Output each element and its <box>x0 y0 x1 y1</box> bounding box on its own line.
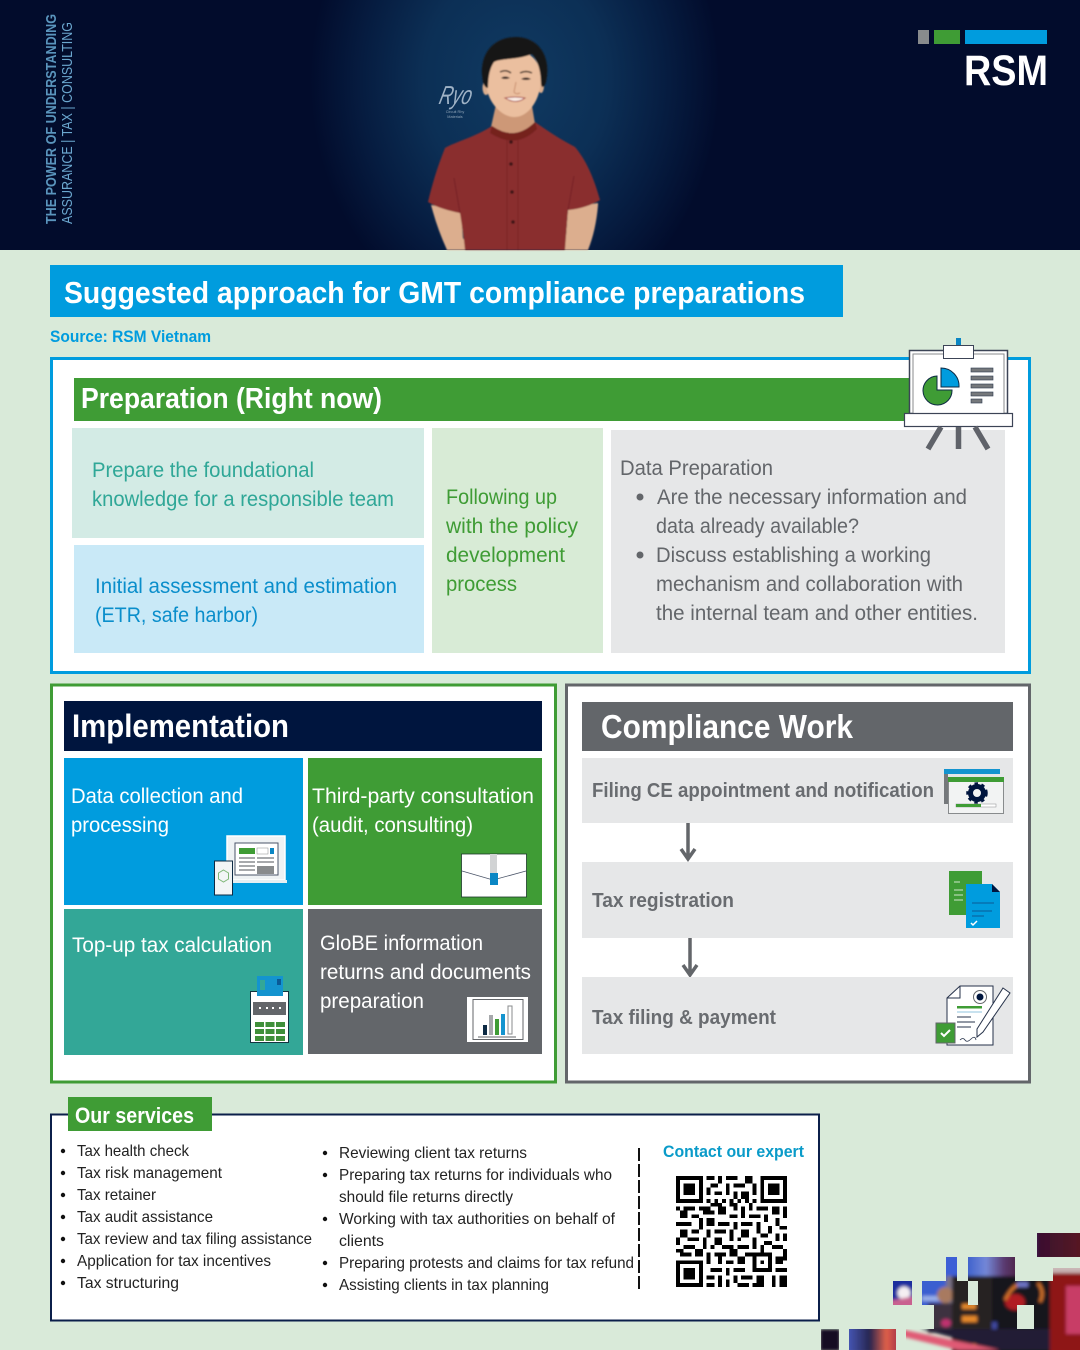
logo: RSM <box>918 30 1048 95</box>
heading: our services: Our services <box>75 1103 194 1128</box>
logo: RSM: RSM <box>964 47 1048 95</box>
heading: preparation <box>74 378 919 421</box>
icon: signed contract <box>936 986 1010 1045</box>
card: data collection: Data collection and <box>71 785 243 808</box>
card: policy follow-up <box>432 428 603 653</box>
card: top-up tax calculation <box>64 909 303 1055</box>
step: tax registration: Tax registration <box>592 889 734 912</box>
heading: compliance work: Compliance Work <box>601 708 854 745</box>
card: initial assessment: (ETR, safe harbor) <box>95 604 258 627</box>
card: data preparation: Are the necessary information and <box>657 486 967 509</box>
list: services left column: Tax health check <box>77 1143 190 1160</box>
card: foundational knowledge: knowledge for a responsible team <box>92 488 394 511</box>
panel: our services <box>51 1097 819 1320</box>
icon: documents <box>949 871 1000 928</box>
card: GloBE information returns <box>308 909 542 1054</box>
signature <box>437 80 476 119</box>
list: services left column: Tax audit assistance <box>77 1209 213 1226</box>
card: foundational knowledge: Prepare the foundational <box>92 459 314 482</box>
signature: Materials <box>447 115 463 119</box>
list: services left column: Application for tax incentives <box>77 1253 271 1270</box>
card: initial assessment <box>74 545 424 653</box>
heading: implementation <box>64 701 542 751</box>
card: initial assessment: Initial assessment and estimation <box>95 575 397 598</box>
card: policy follow-up: process <box>446 573 517 596</box>
panel: compliance work <box>566 685 1030 1082</box>
card: data preparation: Discuss establishing a working <box>656 544 931 567</box>
list: services right column: Assisting clients in tax planning <box>339 1277 549 1294</box>
card: data preparation <box>611 430 1005 653</box>
list: services left column: Tax retainer <box>77 1187 157 1204</box>
list: services right column <box>323 1145 634 1294</box>
card: data collection <box>64 758 303 905</box>
heading: compliance work <box>582 702 1013 751</box>
icon: bar chart <box>467 997 528 1042</box>
step: filing CE appointment <box>582 758 1013 823</box>
heading: preparation: Preparation (Right now) <box>81 383 382 415</box>
list: services right column: Reviewing client tax returns <box>339 1145 527 1162</box>
title banner <box>50 265 843 317</box>
panel: implementation <box>52 685 556 1082</box>
icon: calculator <box>250 976 288 1042</box>
icon: envelope <box>462 854 526 897</box>
icon: presentation easel <box>904 338 1012 449</box>
list: services right column: Preparing tax returns for individuals who <box>339 1167 612 1184</box>
card: policy follow-up: with the policy <box>445 515 578 538</box>
list: services left column <box>61 1143 312 1292</box>
card: third-party consultation <box>308 758 542 905</box>
icon: settings window <box>944 769 1004 814</box>
card: data preparation: the internal team and other entities. <box>656 602 978 625</box>
step: filing CE appointment: Filing CE appointment and notification <box>592 779 934 802</box>
icon: laptop and phone <box>214 836 287 895</box>
list: services right column: Working with tax authorities on behalf of <box>339 1211 616 1228</box>
card: third-party consultation: (audit, consulting) <box>312 814 473 837</box>
step: tax filing and payment <box>582 977 1013 1054</box>
step: tax filing and payment: Tax filing & payment <box>592 1006 776 1029</box>
signature: Circuit Rhy <box>446 110 464 114</box>
tagline: vertical brand text <box>43 14 76 224</box>
card: GloBE information returns: GloBE information <box>320 932 483 955</box>
list: services right column: clients <box>339 1233 384 1250</box>
list: services left column: Tax review and tax filing assistance <box>77 1231 312 1248</box>
card: GloBE information returns: returns and documents <box>320 961 531 984</box>
QR code <box>676 1176 787 1287</box>
card: data preparation: Data Preparation <box>620 457 773 480</box>
list: services right column: should file returns directly <box>339 1189 513 1206</box>
panel: preparation <box>52 338 1030 672</box>
card: third-party consultation: Third-party consultation <box>312 785 534 808</box>
list: services left column: Tax risk management <box>77 1165 223 1182</box>
card: data preparation: data already available? <box>656 515 859 538</box>
heading: our services <box>68 1097 212 1131</box>
contact heading: Contact our expert <box>663 1142 804 1161</box>
heading: implementation: Implementation <box>72 708 289 744</box>
card: policy follow-up: Following up <box>446 486 557 509</box>
list: services right column: Preparing protests and claims for tax refund <box>339 1255 634 1272</box>
card: top-up tax calculation: Top-up tax calculation <box>72 934 272 957</box>
step: tax registration <box>582 862 1013 938</box>
presenter portrait <box>428 37 600 250</box>
list: services left column: Tax structuring <box>77 1275 179 1292</box>
card: data preparation: mechanism and collaboration with <box>656 573 963 596</box>
arrow: down to tax registration <box>681 823 695 859</box>
card: GloBE information returns: preparation <box>320 990 424 1013</box>
signature: Ryo <box>437 80 476 110</box>
card: data collection: processing <box>71 814 169 837</box>
arrow: down to tax filing <box>683 938 697 975</box>
card: foundational knowledge <box>72 428 424 538</box>
title banner: Suggested approach for GMT compliance preparations <box>64 275 805 310</box>
card: policy follow-up: development <box>446 544 565 567</box>
header banner <box>0 0 1080 250</box>
source line: Source: RSM Vietnam <box>50 328 211 346</box>
decorative photo mosaic <box>820 1228 1080 1350</box>
